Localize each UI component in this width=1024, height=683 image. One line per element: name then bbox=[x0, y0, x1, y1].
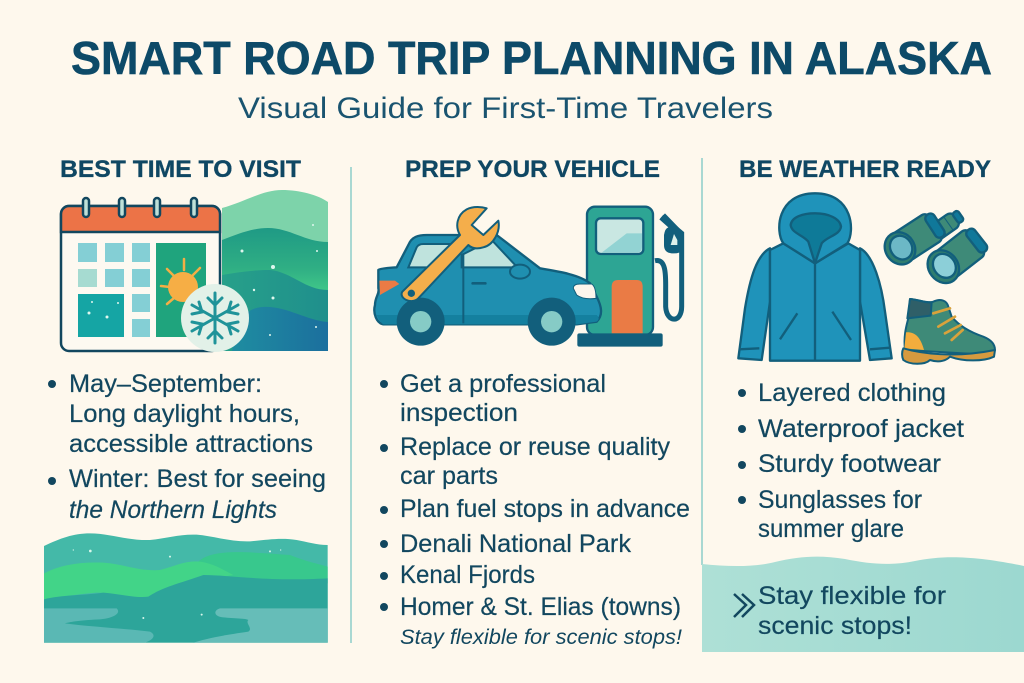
bullet list: what to pack: Sturdy footwear bbox=[758, 450, 941, 478]
bullet list: what to pack: summer glare bbox=[758, 515, 904, 543]
heading: best time to visit: BEST TIME TO VISIT bbox=[60, 156, 301, 183]
bullet list: vehicle prep: car parts bbox=[400, 462, 498, 490]
bullet list: when to go: Long daylight hours, bbox=[69, 400, 300, 428]
heading: prep your vehicle: PREP YOUR VEHICLE bbox=[405, 156, 660, 183]
callout: stay flexible: scenic stops! bbox=[758, 612, 912, 640]
bullet list: when to go: May–September: bbox=[69, 370, 262, 398]
bullet list: when to go: accessible attractions bbox=[69, 430, 313, 458]
icon: car with wrench bbox=[374, 207, 601, 346]
bullet list: what to pack: Sunglasses for bbox=[758, 486, 922, 514]
bullet list: vehicle prep: Stay flexible for scenic stops! bbox=[400, 626, 682, 649]
bullet list: what to pack: Waterproof jacket bbox=[758, 415, 964, 443]
bullet list: vehicle prep bbox=[380, 370, 690, 649]
heading: be weather ready: BE WEATHER READY bbox=[739, 156, 991, 183]
bullet list: when to go bbox=[48, 370, 326, 524]
callout: stay flexible: Stay flexible for bbox=[758, 582, 946, 610]
bullet list: vehicle prep: inspection bbox=[400, 399, 518, 427]
icon: calendar bbox=[61, 198, 220, 351]
title: SMART ROAD TRIP PLANNING IN ALASKA bbox=[71, 32, 992, 84]
icon: double chevron bbox=[734, 594, 754, 617]
illustration: northern lights over water bbox=[44, 533, 328, 643]
panel: be weather ready bbox=[702, 156, 1024, 652]
icon: snowflake badge bbox=[181, 284, 249, 352]
icon: fuel pump bbox=[577, 207, 683, 347]
bullet list: when to go: the Northern Lights bbox=[69, 496, 277, 524]
icon: binoculars bbox=[879, 208, 991, 289]
bullet list: vehicle prep: Plan fuel stops in advance bbox=[400, 495, 690, 523]
bullet list: vehicle prep: Denali National Park bbox=[400, 530, 631, 558]
bullet list: vehicle prep: Replace or reuse quality bbox=[400, 433, 670, 461]
bullet list: what to pack bbox=[738, 379, 964, 543]
icon: rain jacket bbox=[738, 193, 892, 361]
subtitle: Visual Guide for First-Time Travelers bbox=[238, 92, 773, 125]
bullet list: vehicle prep: Get a professional bbox=[400, 370, 606, 398]
bullet list: what to pack: Layered clothing bbox=[758, 379, 946, 407]
bullet list: when to go: Winter: Best for seeing bbox=[69, 465, 326, 493]
callout: stay flexible bbox=[702, 557, 1024, 652]
icon: hiking boot bbox=[902, 299, 995, 364]
panel: prep your vehicle bbox=[374, 156, 690, 649]
bullet list: vehicle prep: Homer & St. Elias (towns) bbox=[400, 593, 681, 621]
panel: best time to visit bbox=[44, 156, 328, 643]
bullet list: vehicle prep: Kenal Fjords bbox=[400, 561, 535, 589]
illustration: aurora landscape bbox=[222, 190, 328, 351]
